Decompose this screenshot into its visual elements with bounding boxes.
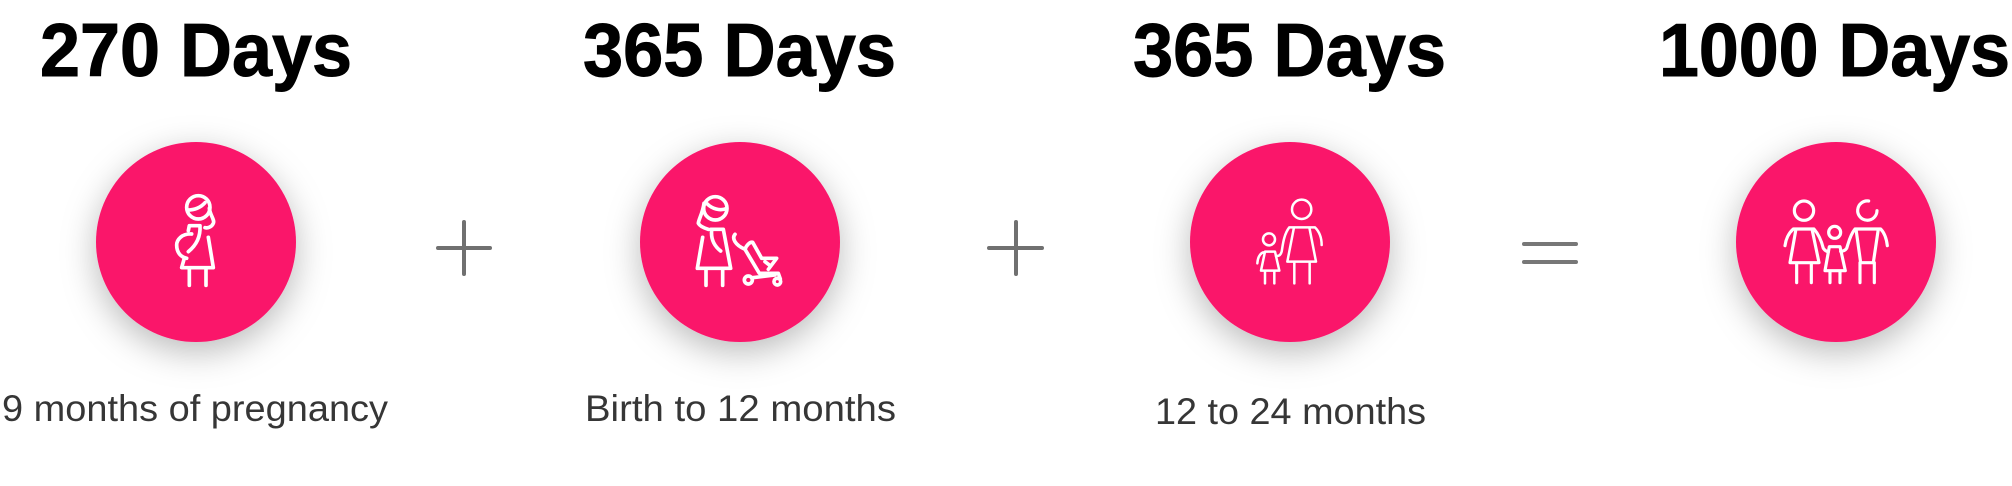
caption: Birth to 12 months: Birth to 12 months bbox=[585, 388, 896, 429]
panel: 270 days pregnancy bbox=[2, 8, 389, 429]
caption: 9 months of pregnancy: 9 months of pregnancy bbox=[2, 388, 389, 429]
icon: adult and child bbox=[1257, 200, 1322, 283]
icon: plus sign bbox=[438, 222, 490, 274]
pink circle bbox=[640, 142, 840, 342]
panel: 365 days 12 to 24 months bbox=[1133, 8, 1446, 432]
icon: woman with stroller bbox=[697, 197, 781, 285]
caption: 12 to 24 months: 12 to 24 months bbox=[1155, 391, 1426, 432]
icon: family of three bbox=[1785, 201, 1887, 283]
heading: 365 Days: 365 Days bbox=[1133, 8, 1446, 92]
icon: pregnant woman bbox=[177, 196, 214, 285]
icon: equals sign bbox=[1524, 244, 1576, 262]
pink circle bbox=[1736, 142, 1936, 342]
heading: 270 Days: 270 Days bbox=[40, 8, 352, 92]
pink circle bbox=[96, 142, 296, 342]
panel: 365 days birth to 12 months bbox=[583, 8, 896, 429]
panel: 1000 days total bbox=[1659, 8, 2010, 342]
icon: plus sign bbox=[989, 222, 1042, 274]
heading: 365 Days: 365 Days bbox=[583, 8, 896, 92]
pink circle bbox=[1190, 142, 1390, 342]
